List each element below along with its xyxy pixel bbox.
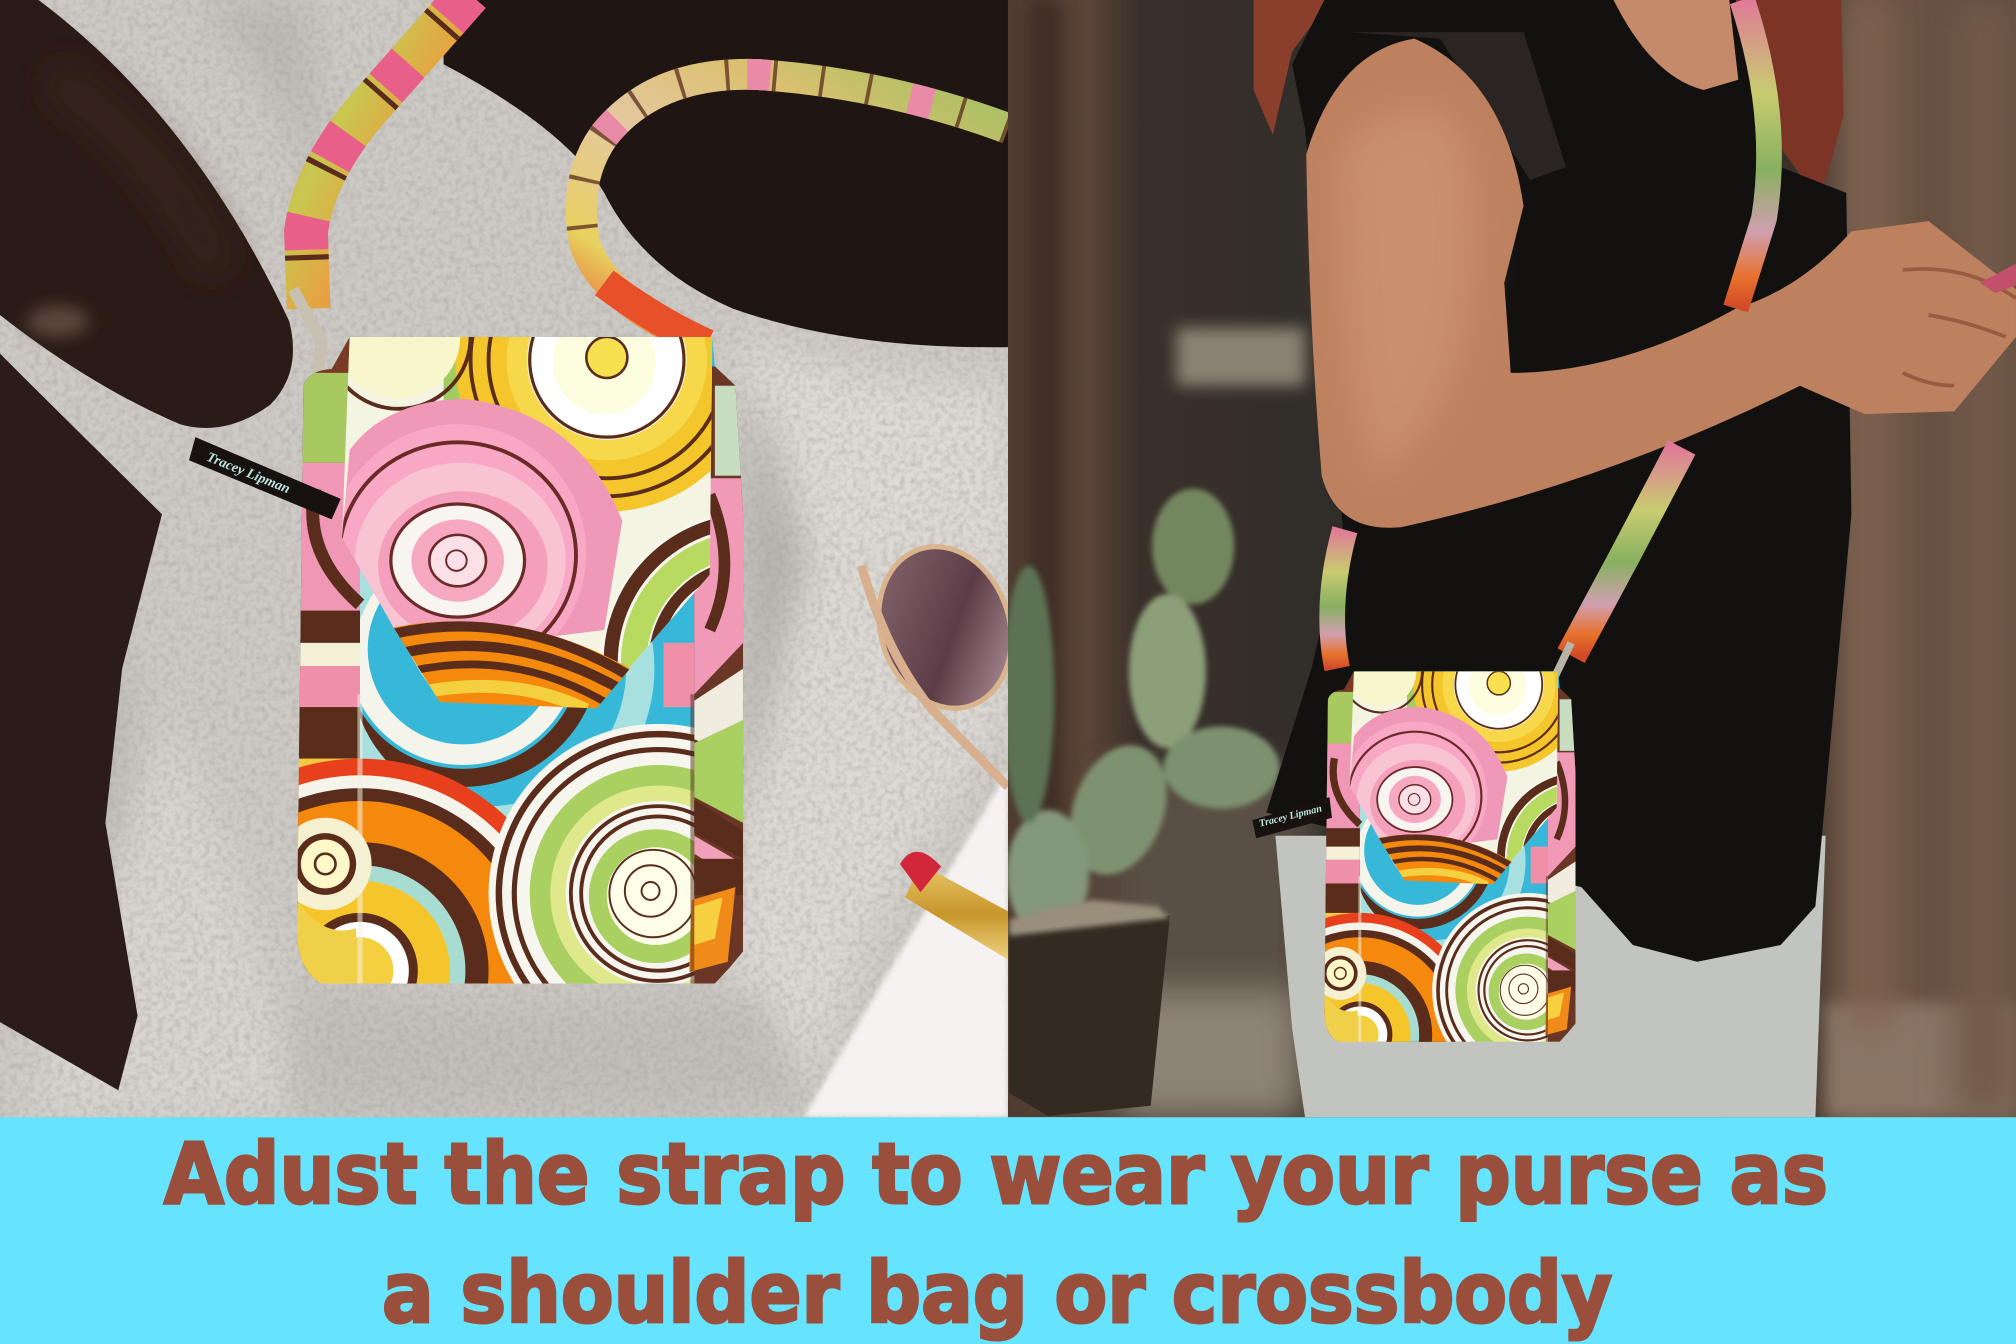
brand tag: Tracey Lipman	[1258, 803, 1323, 830]
boot lower	[0, 354, 162, 1090]
white paper	[804, 771, 1008, 1117]
boot upper	[0, 0, 293, 428]
strap clip	[293, 289, 321, 399]
brand tag: Tracey Lipman	[204, 449, 292, 497]
plant pot	[1009, 915, 1170, 1116]
left strap	[306, 0, 469, 309]
black hat	[444, 0, 1008, 347]
blurred storefront background	[1008, 0, 2016, 1117]
caption band	[0, 1118, 2016, 1344]
sunglasses	[857, 544, 1008, 790]
red hair	[1254, 0, 1844, 201]
photo: woman wearing purse crossbody	[1003, 0, 2016, 1156]
chest skin	[1614, 0, 1738, 90]
crossbody strap upper	[1736, 0, 1769, 309]
right strap	[581, 74, 1008, 345]
phone	[1980, 264, 2016, 293]
purse	[297, 336, 744, 984]
freckled arm and hand	[1306, 39, 2016, 528]
pot soil	[1009, 900, 1170, 936]
photo: flat lay of purse on knit blanket	[0, 0, 1032, 1183]
crossbody strap lower	[1571, 447, 1682, 656]
strap left side	[1332, 530, 1345, 669]
caption line two: a shoulder bag or crossbody	[382, 1244, 1612, 1342]
lipstick	[900, 852, 1008, 960]
blanket	[0, 0, 1008, 1117]
caption line one: Adust the strap to wear your purse as	[164, 1125, 1828, 1223]
sheer sleeve	[1350, 32, 1566, 180]
brand tag	[1252, 797, 1332, 838]
black top	[1266, 0, 1851, 962]
brand tag	[189, 437, 341, 519]
strap metal clip	[1553, 641, 1574, 678]
cactus plant	[1003, 489, 1279, 939]
white trousers	[1275, 836, 1826, 1117]
worn purse	[1324, 671, 1576, 1042]
